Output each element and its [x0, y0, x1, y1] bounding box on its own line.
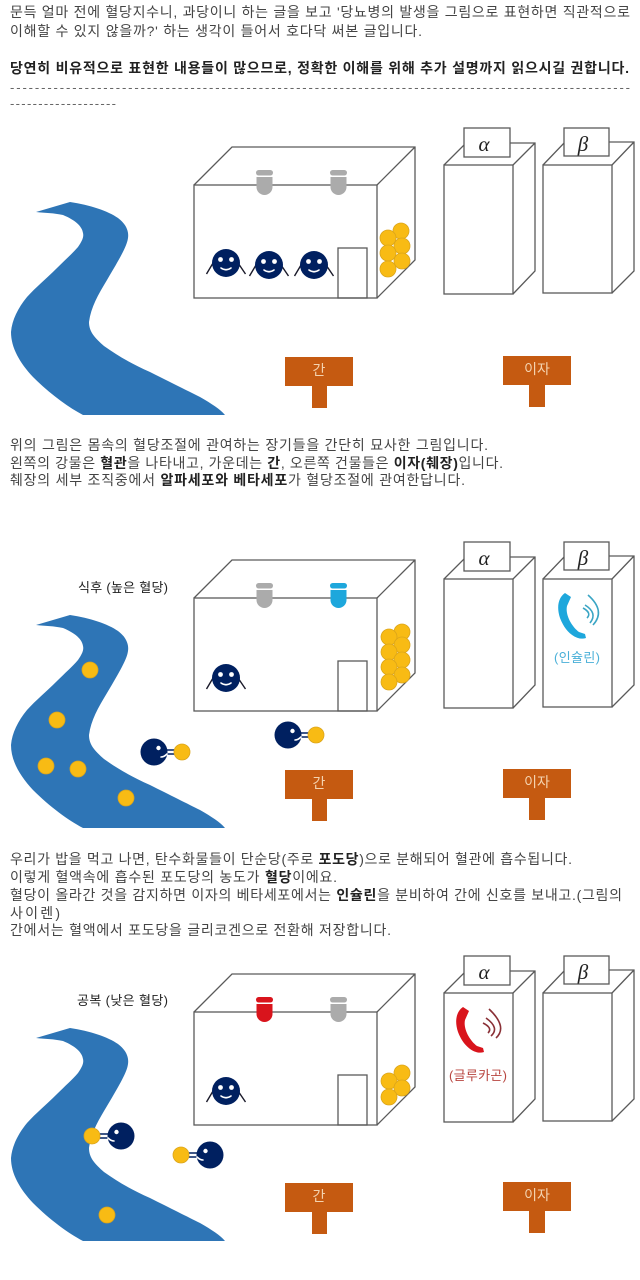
caption: after meal: 식후 (높은 혈당)	[78, 580, 168, 595]
explanation 2: 이렇게 혈액속에 흡수된 포도당의 농도가 혈당이에요.	[10, 869, 337, 885]
pancreas sign: 이자	[524, 1187, 550, 1203]
beta cell building with insulin signal	[543, 542, 634, 707]
label: insulin: (인슐린)	[554, 650, 600, 665]
liver sign	[285, 357, 353, 408]
label: glucagon: (글루카곤)	[449, 1068, 507, 1083]
explanation 2	[10, 851, 622, 938]
enzyme carrying glucose 2	[274, 722, 324, 748]
enzyme carrying glucose 1	[140, 738, 190, 766]
alpha cell building	[444, 542, 535, 708]
smiling enzyme 1	[206, 249, 246, 277]
explanation 2: 혈당이 올라간 것을 감지하면 이자의 베타세포에서는 인슐린을 분비하여 간에 신호를 보내고.(그림의	[10, 887, 622, 903]
beta cell building: β	[577, 960, 589, 984]
intro text: 문득 얼마 전에 혈당지수니, 과당이니 하는 글을 보고 '당뇨병의 발생을 그림으로 표현하면 직관적으로	[10, 4, 630, 20]
smiling enzyme 3	[294, 251, 334, 279]
intro text: 당연히 비유적으로 표현한 내용들이 많으므로, 정확한 이해를 위해 추가 설명까지 읽으시길 권합니다.	[10, 60, 629, 76]
explanation 1	[10, 437, 503, 488]
liver sign	[285, 770, 353, 821]
liver building, glucagon receptor active	[194, 974, 415, 1125]
alpha cell building with glucagon signal	[444, 956, 535, 1122]
liver sign	[285, 1183, 353, 1234]
intro text: 이해할 수 있지 않을까?' 하는 생각이 들어서 호다닥 써본 글입니다.	[10, 23, 422, 39]
smiling enzyme in liver	[206, 664, 246, 692]
intro text: -------------------	[10, 96, 116, 111]
beta cell building: β	[577, 132, 589, 156]
scene 2: after a meal	[11, 542, 634, 828]
alpha cell building	[444, 128, 535, 294]
blood vessel river	[11, 202, 225, 415]
enzyme releasing glucose 2	[173, 1142, 224, 1168]
icon: red phone signal	[456, 1007, 501, 1053]
icon: blue phone signal	[558, 593, 598, 639]
blood vessel with little glucose	[11, 1028, 225, 1241]
intro text	[10, 4, 630, 111]
explanation 1: 왼쪽의 강물은 혈관을 나타내고, 가운데는 간, 오른쪽 건물들은 이자(췌장)입니다.	[10, 455, 503, 471]
liver sign: 간	[313, 775, 326, 791]
explanation 1: 췌장의 세부 조직중에서 알파세포와 베타세포가 혈당조절에 관여한답니다.	[10, 472, 465, 488]
liver sign: 간	[313, 1188, 326, 1204]
pancreas sign	[503, 1182, 571, 1233]
alpha cell building: α	[478, 132, 490, 156]
pancreas sign	[503, 769, 571, 820]
caption: fasting: 공복 (낮은 혈당)	[77, 993, 168, 1008]
liver building	[194, 147, 415, 298]
explanation 1: 위의 그림은 몸속의 혈당조절에 관여하는 장기들을 간단히 묘사한 그림입니다.	[10, 437, 488, 453]
liver sign: 간	[313, 362, 326, 378]
pancreas sign: 이자	[524, 774, 550, 790]
smiling enzyme 2	[250, 251, 288, 279]
smiling enzyme in liver	[206, 1077, 246, 1105]
explanation 2: 우리가 밥을 먹고 나면, 탄수화물들이 단순당(주로 포도당)으로 분해되어 혈관에 흡수됩니다.	[10, 851, 572, 867]
liver building, insulin receptor active	[194, 560, 415, 711]
alpha cell building: α	[478, 546, 490, 570]
alpha cell building with glucagon signal: α	[478, 960, 490, 984]
pancreas sign: 이자	[524, 361, 550, 377]
enzyme releasing glucose 1	[84, 1122, 134, 1150]
beta cell building	[543, 128, 634, 293]
beta cell building	[543, 956, 634, 1121]
blood vessel with glucose	[11, 615, 225, 828]
pancreas sign	[503, 356, 571, 407]
beta cell building with insulin signal: β	[577, 546, 589, 570]
scene 1: organs overview	[11, 128, 634, 415]
scene 3: fasting	[11, 956, 634, 1241]
explanation 2: 사이렌)	[10, 905, 60, 921]
intro text: ----------------------------------------------------------------------------------------------------	[10, 80, 630, 95]
explanation 2: 간에서는 혈액에서 포도당을 글리코겐으로 전환해 저장합니다.	[10, 922, 391, 938]
